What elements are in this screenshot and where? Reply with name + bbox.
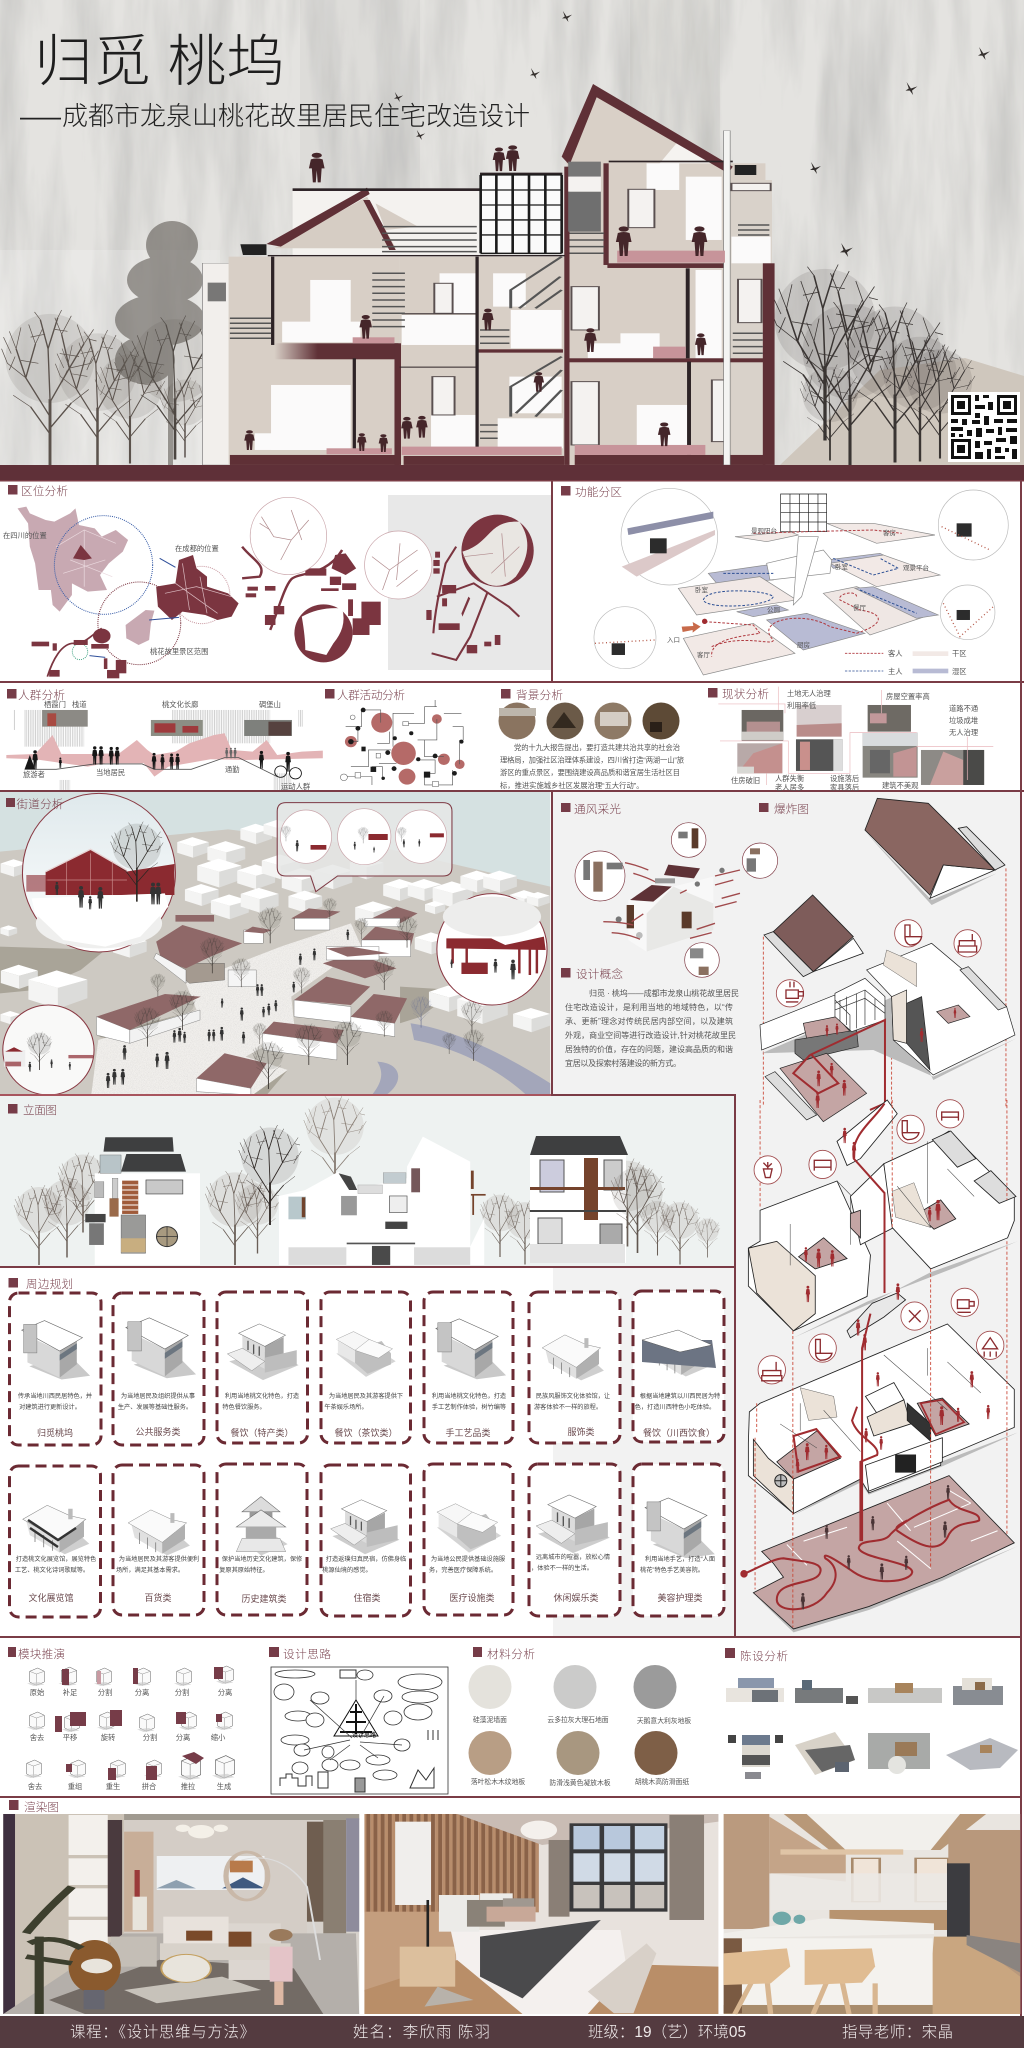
labels: location: 在成都的位置 [175, 544, 219, 553]
heading: renderings [9, 1800, 59, 1814]
interior walls [777, 1141, 981, 1451]
module labels: 重组 [68, 1782, 82, 1791]
labels: zones: 湿区 [952, 667, 967, 676]
card 9: 百货类 [144, 1592, 172, 1603]
subtitle: — [20, 101, 61, 131]
footer: course: 课程：《设计思维与方法》 [70, 2023, 255, 2041]
module labels: 舍去 [30, 1733, 44, 1742]
heading: thinking: 设计思路 [283, 1648, 331, 1661]
building section drawing [202, 84, 775, 465]
labels: location: 在四川的位置 [3, 531, 47, 540]
maps and circles [18, 497, 534, 678]
footer: teacher: 指导老师：宋晶 [842, 2023, 953, 2041]
chimney and pv panels [208, 131, 756, 465]
card 9: 场所，满足其基本需求。 [116, 1566, 184, 1574]
module labels: 分离 [176, 1733, 190, 1742]
heading: activity: 人群活动分析 [337, 688, 405, 702]
module labels: 分离 [135, 1688, 149, 1697]
module labels: 分割 [98, 1688, 112, 1697]
module labels: 分割 [175, 1688, 189, 1697]
labels: crowd: 桃文化长廊 [162, 700, 198, 709]
speech bubble with three views [277, 803, 452, 892]
background text: 理格局，加强社区治理体系建设，四川省打造“两湖一山”旅 [500, 756, 684, 764]
labels: crowd: 栈道 [72, 700, 87, 709]
card 12: 医疗设施类 [449, 1592, 495, 1603]
main red route [744, 1103, 979, 1609]
labels: zones [667, 526, 967, 676]
panel: function zones [561, 486, 1008, 676]
card 9 [113, 1465, 204, 1615]
legend lines [845, 651, 948, 673]
labels: crowd: 当地居民 [96, 768, 125, 777]
site plan on grey [426, 547, 519, 660]
labels: current state: 道路不通 [949, 704, 979, 713]
background text: 游区的重点景区，要围绕建设高品质和谐宜居生活社区目 [500, 768, 680, 777]
callout circle: right corridor [437, 894, 547, 1005]
entry arrow [682, 619, 707, 633]
panel: crowd analysis [6, 688, 323, 791]
card 14: 利用当地手艺，打造“人面 [645, 1555, 715, 1563]
module labels: 旋转 [101, 1733, 115, 1742]
people on section [244, 145, 707, 452]
hand-drawn mind map [271, 1667, 448, 1794]
module labels: 平移 [63, 1733, 77, 1742]
elevation building 2 [279, 1137, 486, 1265]
labels: current state: 设施落后 [830, 774, 859, 783]
red route [793, 1020, 885, 1110]
labels: current state: 家具落后 [830, 783, 859, 792]
heading: elevation: 立面图 [23, 1104, 57, 1117]
furniture row 2 [728, 1732, 1018, 1779]
vertical divider for exploded panel [734, 1095, 736, 1637]
trees right of section [770, 264, 975, 465]
ground band [0, 465, 1024, 480]
panel: street analysis aerial view [0, 792, 550, 1095]
card 8: 打造桃文化展览馆，展览特色 [16, 1555, 96, 1563]
card 4: 午茶娱乐场所。 [324, 1403, 368, 1411]
card 8: 工艺、桃文化诗词歌赋等。 [15, 1566, 89, 1574]
title: 归觅 桃坞 [34, 30, 285, 93]
labels: zones: 卧室 [835, 562, 848, 571]
heading: elevation [8, 1104, 57, 1117]
concept text: 归觅 · 桃坞——成都市龙泉山桃花故里居民 [589, 988, 739, 998]
panel: module evolution [8, 1647, 235, 1791]
heading: planning: 周边规划 [26, 1278, 73, 1291]
card 13: 远离城市的喧嚣，放松心情 [536, 1553, 610, 1561]
pedestrians [106, 929, 349, 1088]
card 1: 归觅桃坞 [37, 1427, 73, 1438]
module labels: 分离 [218, 1688, 232, 1697]
card 11: 打造返璞归真民宿，仿佛身临 [326, 1555, 406, 1563]
heading: modules: 模块推演 [18, 1648, 65, 1661]
massing blocks [0, 820, 550, 1032]
card 2 [113, 1293, 204, 1445]
background text: 标，推进实施城乡社区发展治理“五大行动”。 [500, 781, 644, 790]
panel: ventilation and lighting [561, 803, 778, 977]
card 7: 色，打造川西特色小吃体验。 [635, 1403, 715, 1411]
card 6: 游客体验不一样的旅程。 [534, 1403, 602, 1411]
card 13: 休闲娱乐类 [553, 1592, 599, 1603]
concept text: 住宅改造设计，是利用当地的地域特色，以“传 [565, 1002, 733, 1012]
callout circle: red barn [22, 793, 175, 952]
card 4: 餐饮（茶饮类） [334, 1427, 398, 1438]
panel: materials [468, 1647, 691, 1787]
module labels [28, 1688, 232, 1791]
heading: crowd: 人群分析 [18, 688, 65, 702]
background text: 党的十九大报告提出，要打造共建共治共享的社会治 [514, 743, 680, 752]
card 10: 保护当地历史文化建筑，保修 [222, 1555, 303, 1563]
red-roof houses [96, 907, 418, 1095]
labels: current state: 建筑不美观 [882, 781, 919, 790]
card 3: 特色餐饮服务。 [222, 1403, 266, 1411]
concept text: 宜居以及探索村落建设的新方式。 [565, 1058, 681, 1068]
card 4: 为当地居民及其游客提供下 [329, 1392, 403, 1400]
card 5 [424, 1292, 513, 1443]
elevation building 1 [85, 1137, 200, 1265]
elevation building 3 [530, 1136, 665, 1263]
round window [775, 1475, 787, 1487]
heading: ventilation: 通风采光 [574, 803, 621, 816]
heading: furnishings [725, 1648, 788, 1663]
panel: exploded diagram [740, 798, 1018, 1632]
footer bar [0, 2016, 1024, 2048]
heading: background: 背景分析 [516, 689, 563, 702]
concept text: 外观，商业空间等进行改造设计,针对桃花故里民 [565, 1030, 736, 1040]
windows [432, 183, 771, 445]
labels: location [3, 531, 219, 656]
pink floor patches [327, 251, 725, 455]
panel: location analysis [3, 485, 551, 678]
card 6: 服饰类 [567, 1426, 595, 1437]
heading: materials: 材料分析 [487, 1648, 535, 1661]
module labels: 舍去 [28, 1782, 42, 1791]
glass cube [781, 494, 827, 532]
magnified circles [594, 488, 1008, 669]
card 8 [10, 1466, 100, 1617]
site photos [718, 687, 993, 785]
panel: furnishings [725, 1648, 1018, 1779]
trees behind elevations [14, 1095, 720, 1265]
labels: zones: 餐厅 [853, 603, 866, 612]
stairs and louvres [230, 225, 769, 438]
labels: crowd [23, 700, 311, 791]
material labels: 胡桃木高防滑面纸 [635, 1777, 689, 1786]
heading: exploded: 爆炸图 [774, 803, 809, 816]
labels: zones: 客房 [883, 528, 896, 537]
render 2: bedroom [364, 1814, 718, 2014]
guest route [705, 530, 902, 657]
card 1: 传承当地川西民居特色，并 [18, 1392, 92, 1400]
upper floor [760, 943, 1017, 1080]
labels: zones: 厨房 [797, 640, 810, 649]
concept text: 居独特的价值，存在的问题，建设高品质的和谐 [565, 1044, 733, 1054]
street trees [134, 898, 484, 1089]
labels: crowd: 通勤 [225, 765, 240, 774]
card 12 [424, 1464, 513, 1615]
magnifier circles [575, 823, 778, 977]
panel: current state [708, 687, 993, 792]
heading: location: 区位分析 [21, 485, 68, 498]
material labels: 落叶松木木纹地板 [471, 1777, 525, 1786]
footer: names: 姓名：李欣雨 陈羽 [353, 2023, 490, 2041]
labels: crowd: 运动人群 [281, 782, 311, 791]
card 12: 务，完善医疗保障系统。 [429, 1566, 497, 1574]
birds [394, 11, 990, 257]
background text [500, 743, 684, 790]
card 14: 美容护理类 [657, 1592, 703, 1603]
heading: concept [561, 967, 623, 981]
module labels: 重生 [106, 1782, 120, 1791]
subtitle: 成都市龙泉山桃花故里居民住宅改造设计 [62, 101, 530, 131]
labels: current state: 垃圾成堆 [949, 716, 978, 725]
furniture row 1 [726, 1678, 1003, 1705]
card 10 [217, 1464, 307, 1615]
heading: zones: 功能分区 [575, 486, 622, 499]
card 4 [321, 1292, 410, 1443]
host route [703, 558, 917, 613]
screen panels [568, 162, 601, 232]
plaza [91, 923, 361, 1095]
sepia photos [498, 702, 680, 740]
module icons [24, 1666, 235, 1780]
panel: right column background [553, 792, 1020, 1637]
card 14 [633, 1464, 724, 1616]
card 8: 文化展览馆 [28, 1592, 74, 1603]
labels: crowd: 碉堡山 [259, 700, 281, 709]
divider lines [0, 480, 1024, 2048]
card 5: 手工艺制作体验，树竹编等 [432, 1403, 506, 1411]
card 2: 为当地居民及组织提供从事 [121, 1392, 195, 1400]
card 1 [10, 1293, 101, 1445]
heading: current state: 现状分析 [722, 688, 769, 701]
labels: current state: 房屋空置率高 [886, 692, 930, 701]
activity network diagram [340, 700, 465, 786]
concept text [565, 988, 739, 1068]
module labels: 原始 [30, 1688, 45, 1697]
card 3 [217, 1292, 308, 1443]
labels: zones: 景观阳台 [751, 526, 777, 535]
card 3: 利用当地桃文化特色，打造 [225, 1392, 299, 1400]
labels: zones: 干区 [952, 649, 967, 658]
material swatches [468, 1665, 678, 1775]
card 11: 住宿类 [353, 1592, 381, 1603]
labels: location: 桃花故里景区范围 [150, 647, 208, 656]
card 10: 复原其原始特征。 [219, 1566, 269, 1574]
callout circle: bottom-left street [3, 1005, 94, 1095]
panel: background [498, 689, 684, 790]
footer: class: 班级：19（艺）环境05 [588, 2023, 746, 2041]
material labels: 天鹅意大利灰地板 [637, 1716, 691, 1725]
heading: furnishings: 陈设分析 [740, 1649, 788, 1663]
render 1: living room [3, 1814, 359, 2014]
small site plan [32, 628, 126, 678]
floor icons [754, 1100, 1004, 1384]
module labels: 生成 [217, 1782, 231, 1791]
card 10: 历史建筑类 [241, 1593, 287, 1604]
heading: renderings: 渲染图 [24, 1801, 59, 1814]
card 3: 餐饮（特产类） [230, 1427, 294, 1438]
QR code [948, 392, 1020, 462]
card 5: 手工艺品类 [445, 1427, 491, 1438]
render 3: kitchen [724, 1814, 1020, 2014]
card 14: 桃花”特色手艺美容院。 [640, 1566, 704, 1574]
large site plan [242, 547, 381, 635]
card 5: 利用当地桃文化特色，打造 [432, 1392, 506, 1400]
labels: zones: 入口 [667, 636, 680, 644]
trees left of section [2, 310, 220, 465]
labels: current state [731, 689, 979, 792]
module labels: 推拉 [181, 1782, 196, 1791]
material labels [471, 1715, 691, 1787]
module labels: 补足 [63, 1688, 78, 1697]
material labels: 云多拉灰大理石地面 [547, 1715, 609, 1724]
material labels: 防滑浅黄色凝放木板 [549, 1778, 611, 1787]
labels: zones: 主人 [888, 667, 903, 676]
card 6 [529, 1292, 620, 1443]
labels: zones: 观景平台 [903, 563, 929, 572]
module labels: 缩小 [211, 1733, 226, 1742]
panel: design thinking mind map [269, 1647, 448, 1794]
icons [776, 920, 981, 1007]
card 13: ，体验不一样的生活。 [531, 1564, 593, 1572]
card 13 [529, 1464, 620, 1616]
labels: current state: 老人居多 [775, 783, 804, 792]
header background: textured paper [0, 0, 1024, 466]
labels: crowd: 栖霞门 [44, 700, 66, 709]
material labels: 硅藻泥墙面 [473, 1715, 507, 1724]
concept text: 承、更新”理念对传统民居内部空间，以及建筑 [565, 1016, 733, 1026]
card 2: 公共服务类 [135, 1426, 181, 1437]
card 1: 对建筑进行更新设计。 [19, 1403, 81, 1411]
heading: street: 街道分析 [16, 797, 64, 811]
panel: crowd activity network [325, 688, 465, 786]
pine tree [115, 221, 205, 465]
ventilation diagram [575, 823, 778, 977]
people on floors [796, 1128, 990, 1473]
card 7: 根据当地建筑以川西民居为特 [640, 1392, 720, 1400]
roof and slab lines [230, 84, 775, 465]
labels: current state: 人群失衡 [775, 774, 804, 783]
river [411, 1023, 550, 1095]
heading: concept: 设计概念 [576, 967, 623, 981]
panel: renderings [3, 1800, 1020, 2014]
labels: current state: 利用率低 [787, 701, 817, 710]
waveform and people chart [6, 710, 323, 790]
labels: current state: 无人治理 [949, 728, 979, 737]
module labels: 拼合 [142, 1782, 157, 1791]
panel: surrounding planning [0, 1266, 736, 1617]
card 6: 民族风服饰文化体验馆，让 [536, 1392, 610, 1400]
labels: zones: 卧室 [695, 585, 708, 594]
card 12: 为当地公民提供基础设施服 [431, 1555, 505, 1563]
card 7: 餐饮（川西饮食） [643, 1427, 715, 1438]
panel: elevations [0, 1094, 736, 1267]
roofs and upper floor [760, 798, 1017, 1122]
module labels: 分割 [143, 1733, 157, 1742]
card 11: 桃源仙境的感觉。 [322, 1566, 372, 1574]
card 11 [321, 1465, 410, 1616]
labels: current state: 土地无人治理 [787, 689, 831, 698]
card 7 [633, 1291, 724, 1442]
labels: current state: 住房破旧 [731, 776, 760, 785]
card 9: 为当地居民及其游客提供便利 [119, 1555, 199, 1563]
labels: crowd: 旅游者 [23, 770, 45, 779]
labels: zones: 客厅 [697, 650, 710, 659]
floors 1, 2 and base [740, 1100, 1018, 1632]
exploded floor plates [594, 488, 1008, 675]
labels: zones: 公厕 [767, 606, 780, 614]
card 2: 生产、发展等基础性服务。 [118, 1403, 192, 1411]
labels: zones: 客人 [888, 649, 903, 658]
hill behind right trees [780, 358, 1024, 465]
glass block [481, 175, 562, 253]
panel: design concept [561, 967, 739, 1068]
hand-drawn mind map: 设计思路 [352, 1731, 376, 1739]
